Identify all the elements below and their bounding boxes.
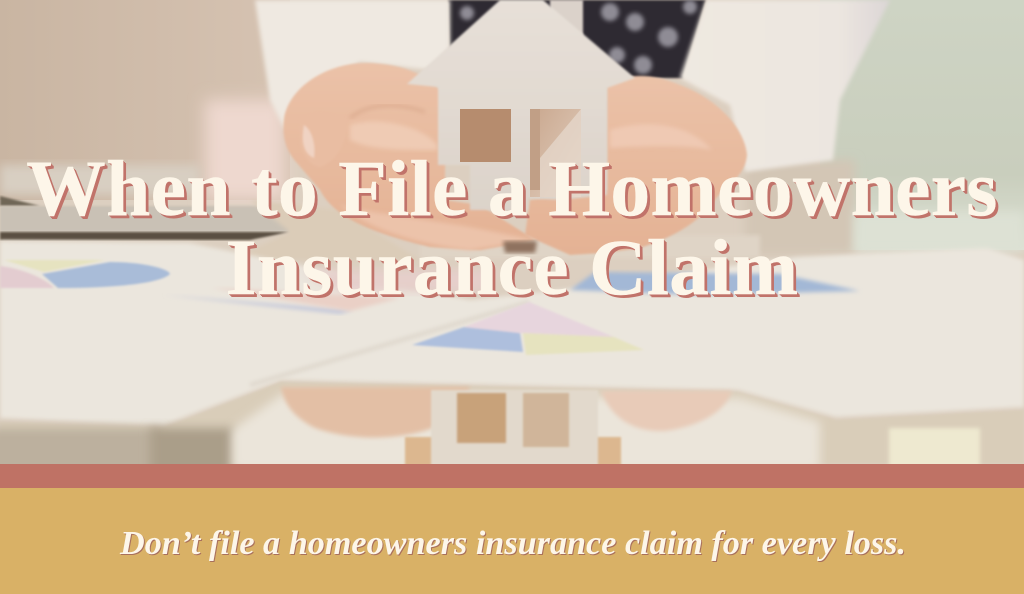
sweater and tie (255, 0, 890, 172)
left pie chart (0, 260, 170, 288)
document sheets with pie charts (0, 241, 1024, 425)
title (26, 145, 998, 312)
reflection on glass table (0, 382, 1024, 478)
title line 2: Insurance Claim (226, 224, 798, 312)
subtitle band (0, 488, 1024, 594)
paper house (407, 0, 635, 210)
subtitle text: Don’t file a homeowners insurance claim for every loss. (120, 525, 906, 562)
centre pie chart (412, 302, 644, 355)
hands (283, 63, 747, 255)
title line 1: When to File a Homeowners (26, 145, 998, 233)
accent stripe (0, 464, 1024, 488)
background photo: hands holding paper house over documents (0, 0, 1024, 464)
background wall and desk (0, 0, 1024, 260)
